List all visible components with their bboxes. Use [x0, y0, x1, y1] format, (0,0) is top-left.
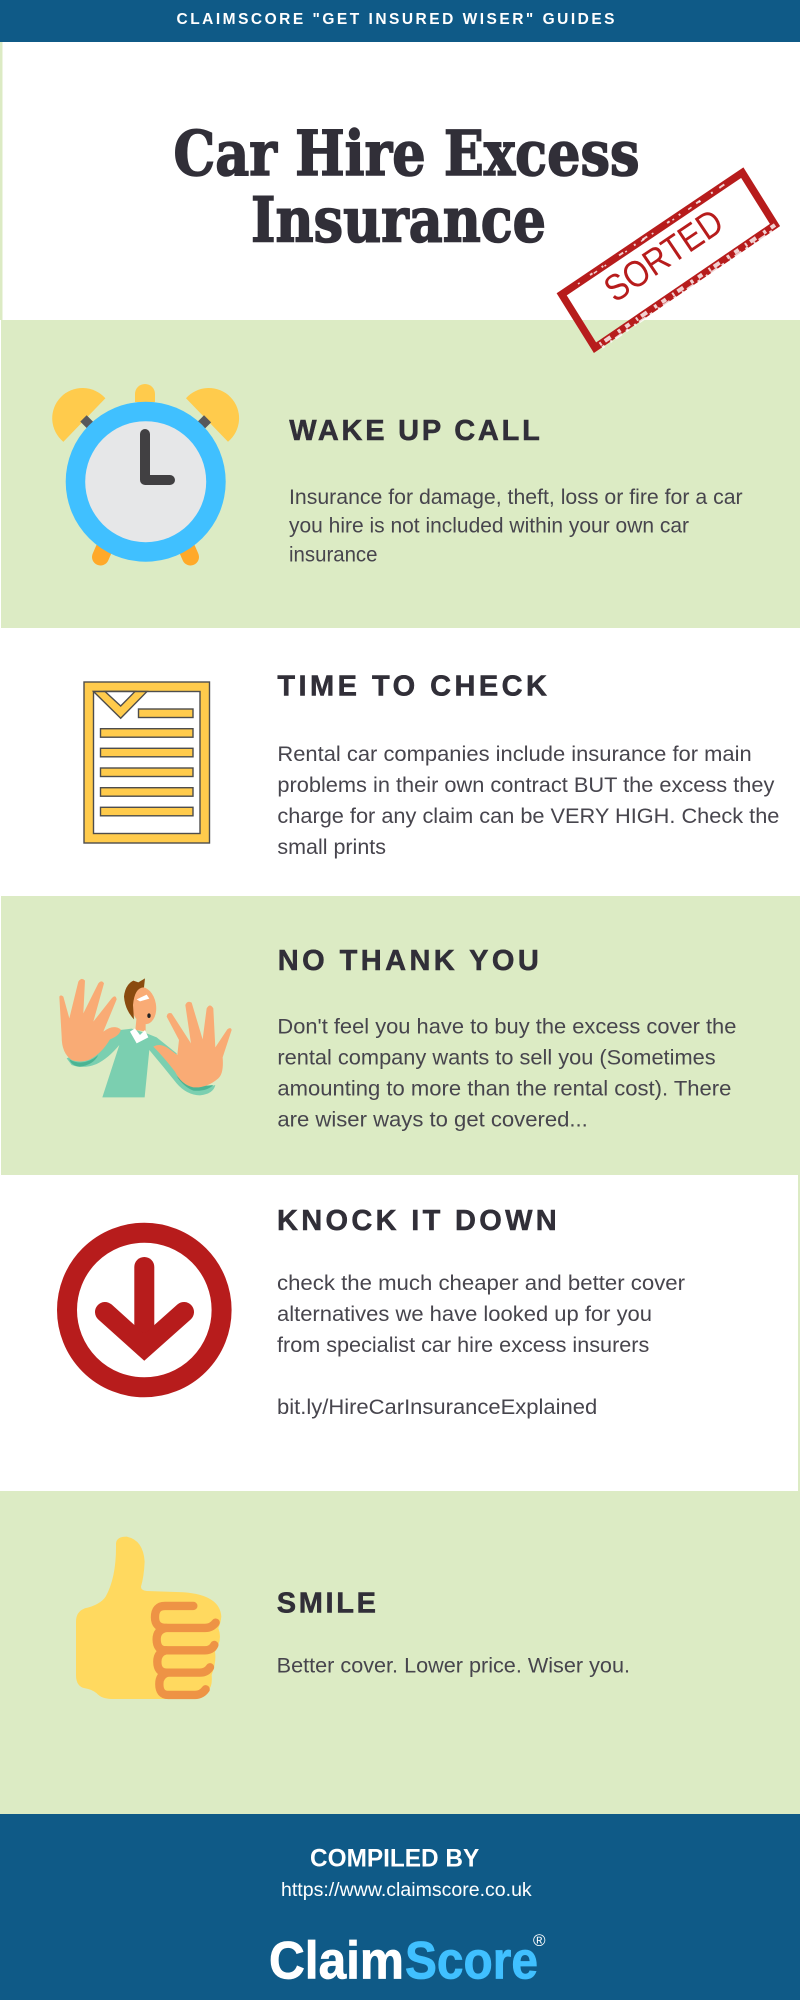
- body text: knock it down: alternatives we have looked up for you: [277, 1303, 652, 1326]
- body text: time to check: charge for any claim can be VERY HIGH. Check the: [277, 805, 779, 828]
- body text: smile: Better cover. Lower price. Wiser you.: [277, 1655, 630, 1678]
- top banner: [0, 0, 800, 42]
- heading: no thank you: NO THANK YOU: [278, 945, 539, 977]
- body text: time to check: [277, 743, 779, 859]
- icon: alarm clock: [52, 384, 239, 562]
- body text: knock it down: bit.ly/HireCarInsuranceExplained: [277, 1396, 597, 1419]
- heading: smile: SMILE: [277, 1588, 376, 1620]
- top banner: CLAIMSCORE "GET INSURED WISER" GUIDES: [176, 11, 614, 28]
- title: Insurance: [251, 184, 546, 257]
- body text: time to check: Rental car companies include insurance for main: [277, 743, 752, 766]
- stamp: sorted: SORTED: [597, 201, 731, 310]
- body text: wake up call: you hire is not included within your own car: [289, 515, 689, 538]
- panel: no thank you: [1, 896, 800, 1175]
- logo: ClaimScore: Score: [405, 1931, 538, 1990]
- logo: ClaimScore: [269, 1931, 546, 1990]
- body text: knock it down: [277, 1272, 685, 1419]
- panel: knock it down: [67, 1175, 800, 1492]
- panel: smile: [0, 1491, 800, 1814]
- title: Car Hire Excess: [174, 117, 640, 190]
- website url: https://www.claimscore.co.uk: [281, 1880, 532, 1901]
- heading: time to check: TIME TO CHECK: [277, 671, 547, 703]
- body text: no thank you: are wiser ways to get covered...: [277, 1109, 588, 1132]
- panel: time to check: [84, 671, 779, 859]
- panel: wake up call: [1, 320, 800, 628]
- icon: down arrow in circle: [67, 1233, 222, 1387]
- body text: no thank you: [277, 1016, 736, 1132]
- body text: wake up call: insurance: [289, 544, 378, 567]
- icon: man with raised hands: [59, 978, 232, 1097]
- icon: thumbs up: [76, 1537, 221, 1699]
- body text: wake up call: Insurance for damage, theft, loss or fire for a car: [289, 486, 743, 509]
- compiled by heading: COMPILED BY: [310, 1845, 480, 1873]
- icon: document: [84, 682, 210, 843]
- heading: wake up call: WAKE UP CALL: [289, 415, 540, 447]
- footer: [0, 1814, 800, 2000]
- body text: knock it down: from specialist car hire excess insurers: [277, 1334, 649, 1357]
- stamp: sorted: [562, 172, 775, 349]
- body text: no thank you: Don't feel you have to buy the excess cover the: [277, 1016, 736, 1039]
- body text: knock it down: check the much cheaper and better cover: [277, 1272, 685, 1295]
- title: [0, 42, 640, 320]
- heading: knock it down: KNOCK IT DOWN: [277, 1205, 557, 1237]
- body text: no thank you: rental company wants to sell you (Sometimes: [277, 1047, 716, 1070]
- logo: ClaimScore: ®: [533, 1931, 546, 1950]
- body text: time to check: small prints: [277, 836, 386, 859]
- body text: no thank you: amounting to more than the rental cost). There: [277, 1078, 731, 1101]
- body text: wake up call: [289, 486, 743, 567]
- logo: ClaimScore: Claim: [269, 1931, 404, 1990]
- body text: time to check: problems in their own contract BUT the excess they: [277, 774, 775, 797]
